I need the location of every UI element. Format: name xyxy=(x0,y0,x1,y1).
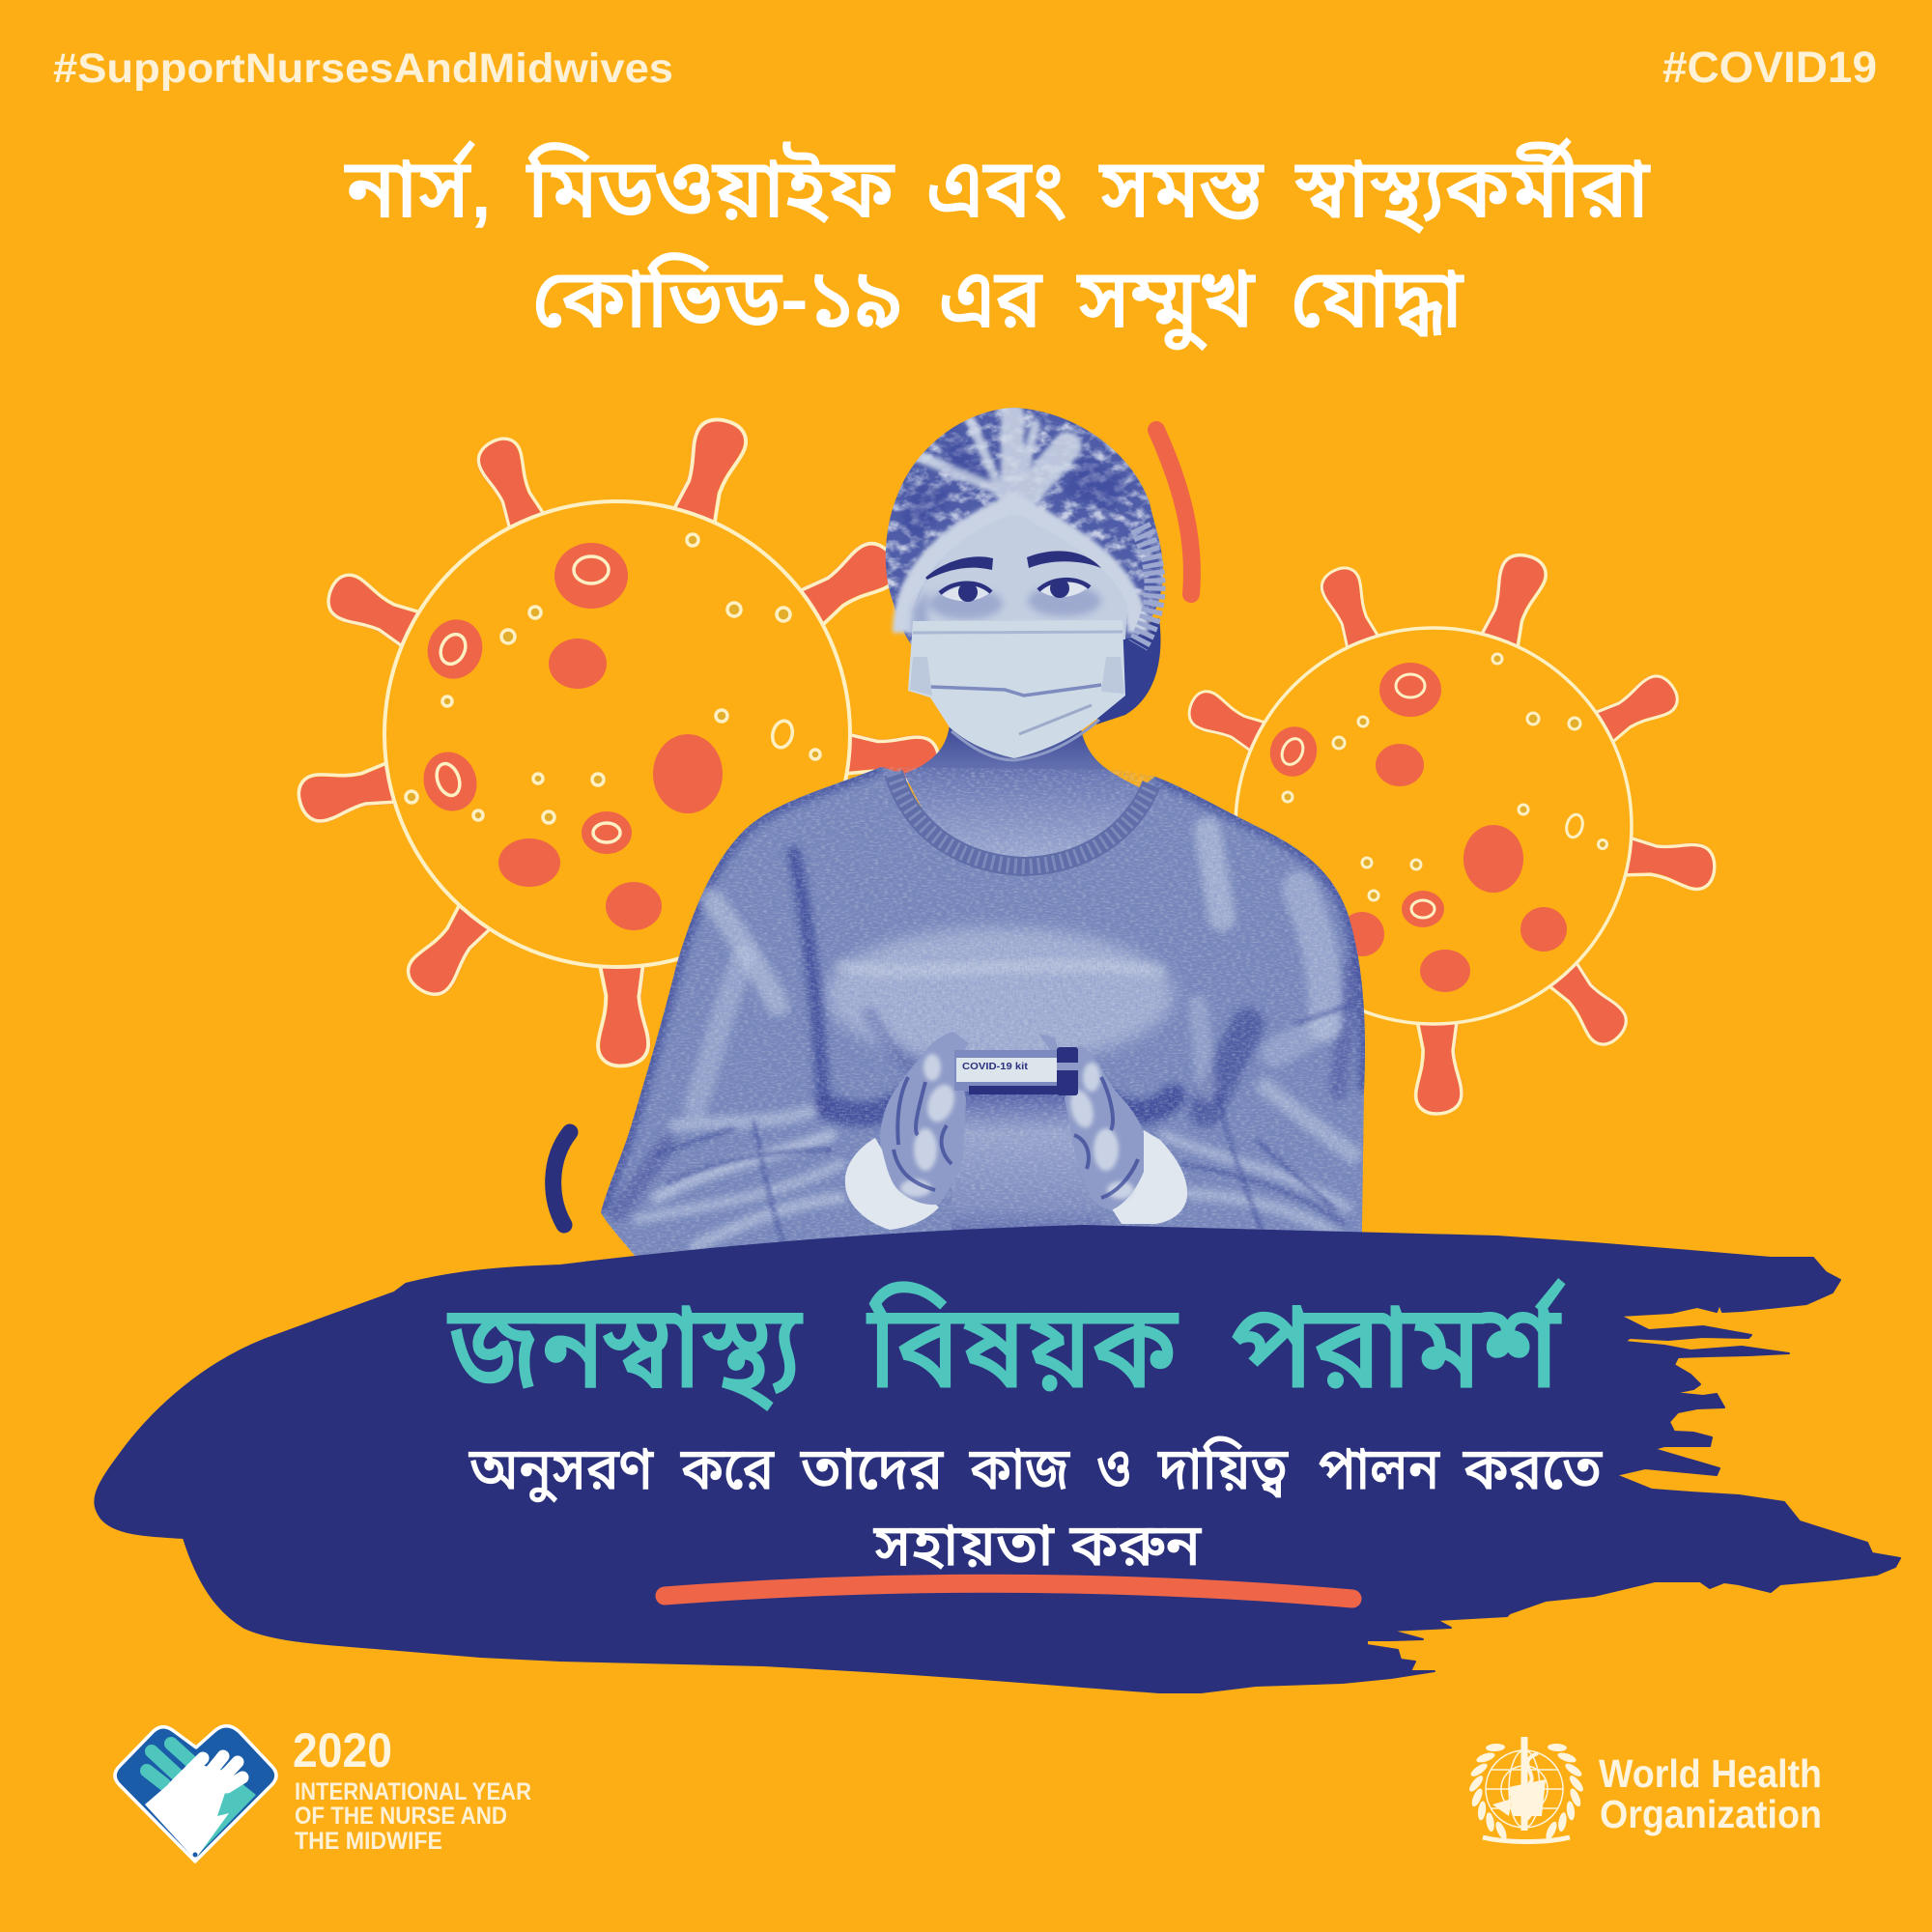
title line 2: যোদ্ধা xyxy=(1291,253,1464,344)
title xyxy=(345,139,1651,349)
gown fabric grain light xyxy=(599,763,1372,1265)
nurse figure xyxy=(599,406,1372,1265)
subheading line 1: করতে xyxy=(1463,1436,1604,1501)
coral arc accent xyxy=(1156,430,1192,594)
left glove finger highlights xyxy=(900,1054,959,1197)
white cuffs xyxy=(845,1130,1187,1230)
title line 2 xyxy=(532,253,1464,349)
WHO wordmark xyxy=(1599,1751,1822,1836)
teal fingers xyxy=(147,1744,190,1784)
gown xyxy=(599,763,1372,1265)
eye shadows xyxy=(913,585,1101,638)
gown fabric grain dark xyxy=(599,763,1372,1265)
icon: WHO emblem xyxy=(1467,1737,1585,1841)
light folds xyxy=(638,831,1352,1246)
subheading line 1: ও xyxy=(1096,1436,1131,1501)
globe xyxy=(1486,1750,1563,1828)
title line 1: মিডওয়াইফ xyxy=(526,143,895,234)
heading: public health advice xyxy=(447,1279,1564,1411)
title line 1: সমস্ত xyxy=(1099,143,1264,234)
right virus rings xyxy=(1278,674,1585,918)
hashtag: COVID19: #COVID19 xyxy=(1662,43,1877,92)
hair bun xyxy=(1096,618,1160,724)
staff and snake xyxy=(1520,1737,1538,1831)
white hand xyxy=(145,1756,242,1860)
left eye xyxy=(940,582,991,602)
hashtag: SupportNursesAndMidwives: #SupportNursesAndMidwives xyxy=(53,45,673,92)
title line 1 xyxy=(345,139,1651,234)
surgical mask xyxy=(908,620,1125,760)
subheading line 2: সহায়তা করুন xyxy=(873,1513,1202,1577)
gown edge shading xyxy=(601,767,1365,1212)
WHO wordmark: Organization xyxy=(1600,1792,1822,1836)
sharp wrinkle lines xyxy=(657,1005,1357,1251)
continents xyxy=(1492,1779,1546,1816)
title line 1: স্বাস্থ্যকর্মীরা xyxy=(1295,139,1651,234)
right virus body xyxy=(1236,628,1632,1024)
subheading text xyxy=(469,1436,1604,1577)
belly panel xyxy=(952,1092,1101,1231)
vial label: COVID-19 kit xyxy=(962,1062,1029,1072)
subheading line 1: তাদের xyxy=(800,1436,944,1501)
title line 2: কোভিড-১৯ xyxy=(532,253,902,344)
gown collar xyxy=(894,773,1151,867)
coral underline xyxy=(665,1583,1352,1599)
navy arc accent xyxy=(554,1132,570,1225)
logo caption: OF THE NURSE AND xyxy=(295,1803,507,1830)
logo year: 2020 xyxy=(293,1723,392,1777)
right virus spikes xyxy=(1182,549,1718,1114)
logo caption: THE MIDWIFE xyxy=(295,1828,442,1855)
subheading line 1: পালন xyxy=(1319,1436,1440,1501)
neck xyxy=(904,724,1145,865)
left virus blobs xyxy=(415,543,723,930)
subheading line 1: করে xyxy=(680,1436,775,1501)
WHO wordmark: World Health xyxy=(1599,1751,1822,1796)
chest pale area xyxy=(826,927,1174,1063)
right virus blobs xyxy=(1264,663,1567,992)
title line 1: এবং xyxy=(926,143,1065,234)
left glove xyxy=(880,1032,969,1205)
icon: heart with hands xyxy=(115,1726,276,1861)
mask mesh edge xyxy=(910,657,1124,696)
dark folds xyxy=(618,853,1352,1212)
right glove xyxy=(1038,1034,1144,1210)
right eye xyxy=(1038,579,1090,598)
eyebrows xyxy=(925,551,1101,580)
test vial xyxy=(954,1047,1078,1095)
left virus rings xyxy=(433,556,795,842)
right virus illustration xyxy=(1182,549,1718,1114)
logo caption: INTERNATIONAL YEAR xyxy=(295,1778,531,1805)
emblem ribbon xyxy=(1483,1837,1570,1841)
subheading line 1: কাজ xyxy=(969,1436,1070,1501)
title line 2: সম্মুখ xyxy=(1077,253,1256,349)
left virus illustration xyxy=(296,412,941,1066)
nurse and midwife year logo xyxy=(115,1723,531,1861)
heading: public health advice: বিষয়ক xyxy=(867,1282,1179,1411)
subheading line 1 xyxy=(469,1436,1604,1502)
navy paint brush stroke xyxy=(95,1226,1900,1692)
laurel leaves xyxy=(1467,1744,1585,1841)
left virus spikes xyxy=(296,412,941,1066)
cap ruffle xyxy=(1138,526,1155,645)
cap crumple texture xyxy=(879,406,1169,657)
heading: public health advice: জনস্বাস্থ্য xyxy=(447,1282,802,1411)
logo caption xyxy=(295,1778,531,1855)
right glove finger highlights xyxy=(1066,1063,1134,1199)
left virus small dots xyxy=(406,534,820,823)
cap elastic band xyxy=(903,504,1138,633)
cap dark patches xyxy=(898,425,1130,541)
hair net cap xyxy=(879,406,1169,657)
subheading line 1: দায়িত্ব xyxy=(1157,1436,1289,1501)
left virus body xyxy=(384,501,850,967)
heading: public health advice: পরামর্শ xyxy=(1232,1279,1564,1411)
subheading line 1: অনুসরণ xyxy=(469,1436,654,1502)
title line 1: নার্স, xyxy=(345,142,493,234)
face xyxy=(911,514,1127,639)
title line 2: এর xyxy=(939,253,1042,344)
right virus small dots xyxy=(1283,654,1607,900)
World Health Organization logo xyxy=(1467,1737,1822,1841)
